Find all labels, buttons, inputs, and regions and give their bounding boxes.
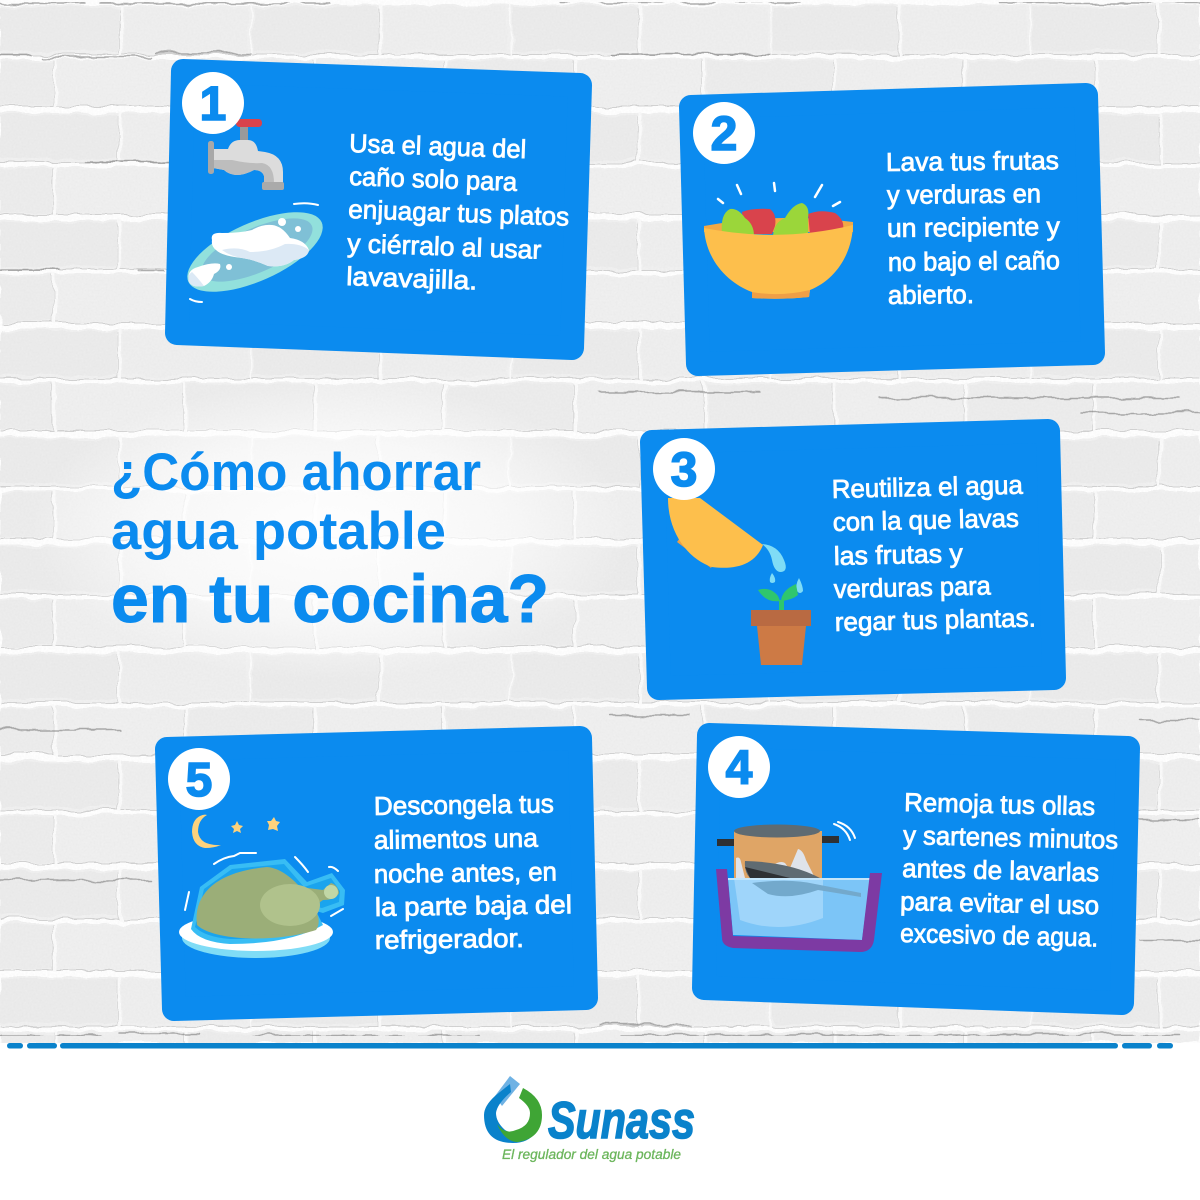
text: step 2: no bajo el caño bbox=[888, 245, 1060, 277]
text: step 2 bbox=[886, 145, 1060, 310]
text: step 2: abierto. bbox=[888, 279, 974, 310]
icon: water drop ring bbox=[484, 1076, 542, 1143]
text: step 5: alimentos una bbox=[374, 823, 539, 855]
title: agua potable bbox=[111, 502, 446, 561]
number badge 4 bbox=[708, 736, 770, 798]
icon: faucet bbox=[208, 119, 284, 190]
text: step 4: excesivo de agua. bbox=[900, 918, 1098, 952]
icon: moon and stars bbox=[192, 815, 280, 848]
text: step 1: caño solo para bbox=[349, 161, 518, 197]
text: step 1: enjuagar tus platos bbox=[348, 194, 570, 232]
number badge 1: 1 bbox=[200, 78, 226, 131]
number badge 5: 5 bbox=[186, 754, 212, 807]
number badge 3 bbox=[653, 438, 715, 500]
number badge 4: 4 bbox=[726, 742, 753, 795]
wordmark: Sunass bbox=[548, 1092, 695, 1150]
text: step 2: y verduras en bbox=[887, 178, 1041, 210]
text: step 1: lavavajilla. bbox=[346, 261, 478, 296]
text: step 3: verduras para bbox=[833, 570, 992, 604]
panel: step 3 bbox=[652, 431, 1054, 688]
title bbox=[111, 443, 549, 637]
text: step 3: las frutas y bbox=[833, 538, 963, 571]
number badge 1 bbox=[182, 72, 244, 134]
icon: tilted bowl pouring water bbox=[668, 498, 803, 593]
icon: frozen turkey on plate bbox=[179, 853, 345, 958]
text: step 4: y sartenes minutos bbox=[903, 820, 1118, 855]
title: en tu cocina? bbox=[111, 561, 549, 637]
text: step 5: refrigerador. bbox=[375, 923, 524, 955]
number badge 5 bbox=[168, 748, 230, 810]
text: step 2: Lava tus frutas bbox=[886, 145, 1059, 177]
text: step 3: con la que lavas bbox=[832, 503, 1019, 537]
icon: plate with foam bbox=[177, 196, 333, 308]
panel: step 2 bbox=[691, 95, 1093, 364]
panel: step 5 bbox=[167, 738, 586, 1009]
title: ¿Cómo ahorrar bbox=[111, 443, 481, 502]
text: step 3: regar tus plantas. bbox=[834, 602, 1036, 637]
number badge 3: 3 bbox=[671, 444, 697, 497]
icon: potted plant bbox=[751, 584, 811, 665]
footer divider: segmented blue band bbox=[7, 1043, 1173, 1048]
text: step 3: Reutiliza el agua bbox=[831, 470, 1024, 504]
icon: bowl of fruit bbox=[704, 183, 853, 299]
text: step 4: antes de lavarlas bbox=[902, 853, 1099, 887]
icon: soaking pot and pan bbox=[716, 822, 882, 952]
panel: step 1 bbox=[177, 71, 580, 348]
panel: step 4 bbox=[704, 735, 1128, 1003]
logo: Sunass bbox=[484, 1076, 695, 1150]
text: step 1 bbox=[346, 128, 570, 296]
tagline: El regulador del agua potable bbox=[502, 1147, 681, 1162]
text: step 4 bbox=[900, 787, 1118, 952]
text: step 5 bbox=[374, 788, 572, 955]
text: step 2: un recipiente y bbox=[887, 211, 1060, 243]
text: step 4: Remoja tus ollas bbox=[904, 787, 1095, 821]
text: step 5: noche antes, en bbox=[374, 856, 557, 889]
number badge 2 bbox=[693, 102, 755, 164]
text: step 5: Descongela tus bbox=[374, 788, 554, 821]
number badge 2: 2 bbox=[711, 108, 737, 161]
text: step 4: para evitar el uso bbox=[900, 886, 1099, 921]
text: step 3 bbox=[831, 470, 1036, 637]
text: step 5: la parte baja del bbox=[375, 889, 572, 922]
text: step 1: y ciérralo al usar bbox=[347, 228, 542, 265]
text: step 1: Usa el agua del bbox=[349, 128, 527, 164]
